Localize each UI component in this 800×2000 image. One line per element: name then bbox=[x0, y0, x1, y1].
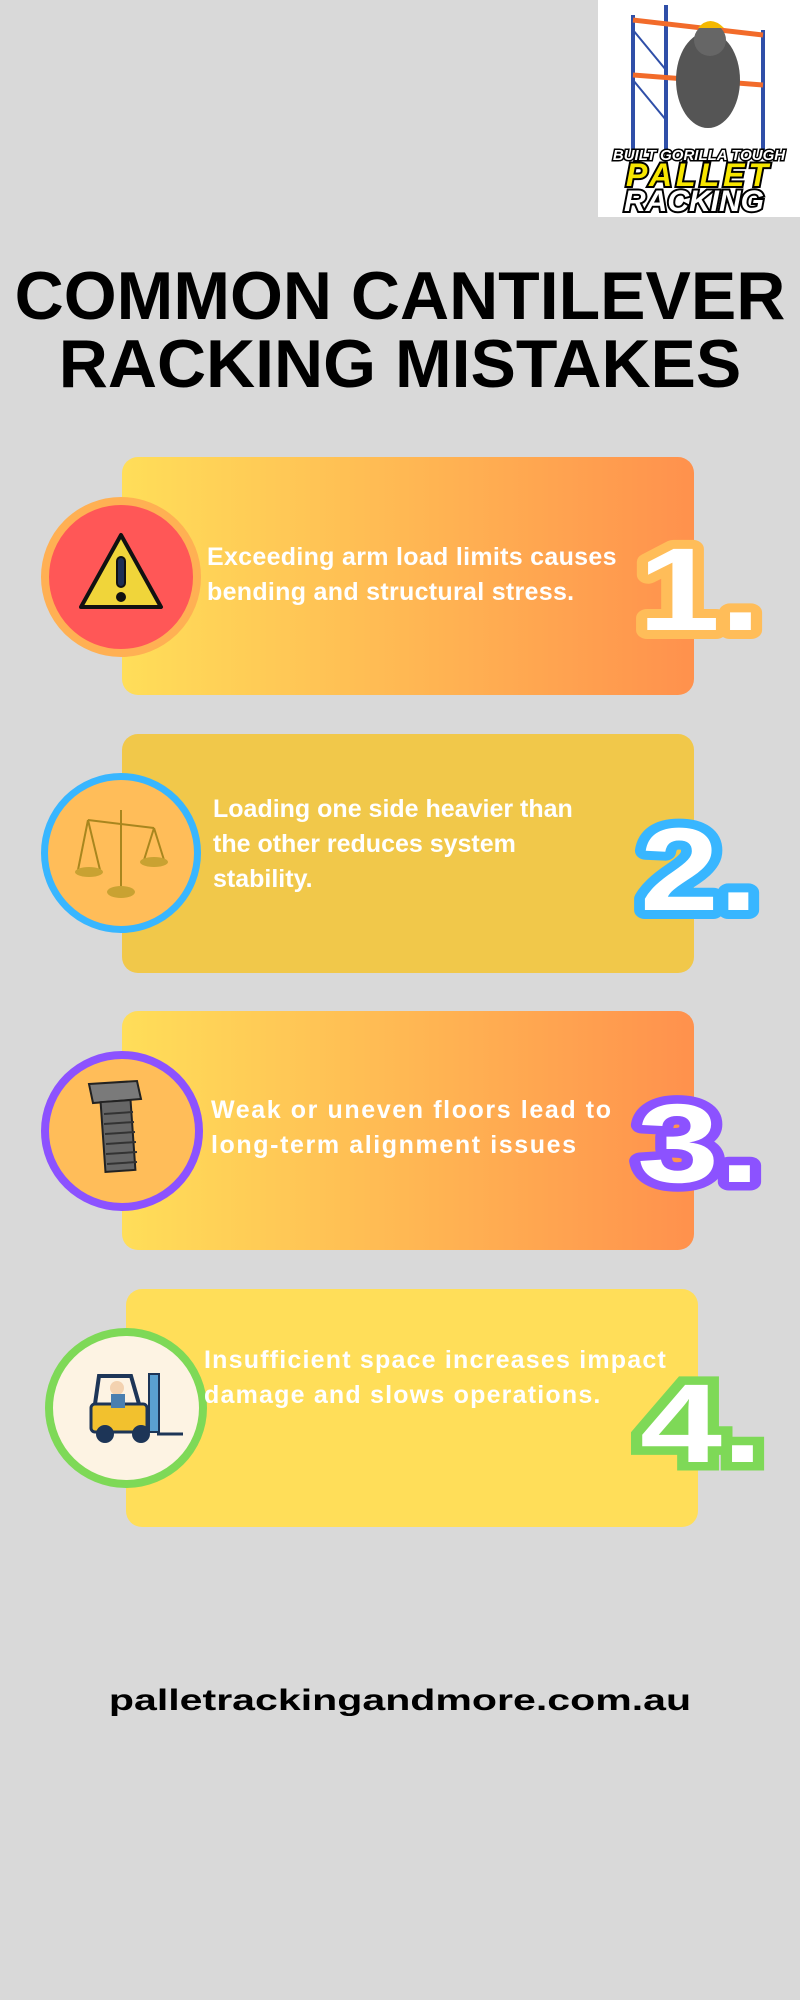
icon: bolt bbox=[41, 1051, 203, 1211]
title: COMMON CANTILEVER bbox=[15, 260, 785, 334]
icon: scales bbox=[41, 773, 201, 933]
panel: mistake 3 bbox=[122, 1011, 694, 1250]
panel: mistake 2 bbox=[122, 734, 694, 973]
logo bbox=[598, 0, 800, 217]
url footer: palletrackingandmore.com.au bbox=[109, 1682, 691, 1717]
icon: warning bbox=[41, 497, 201, 657]
text 4: Insufficient space increases impact damage and slows operations. bbox=[204, 1346, 667, 1409]
title: RACKING MISTAKES bbox=[59, 326, 741, 400]
text 1: Exceeding arm load limits causes bending and structural stress. bbox=[207, 543, 617, 606]
panel: mistake 4 bbox=[126, 1289, 698, 1527]
text 2: Loading one side heavier than the other reduces system stability. bbox=[213, 795, 573, 893]
icon: forklift bbox=[45, 1328, 207, 1488]
panel: mistake 1 bbox=[122, 457, 694, 695]
logo: PALLET bbox=[626, 157, 772, 193]
title bbox=[15, 260, 785, 400]
logo: BUILT GORILLA TOUGH bbox=[613, 147, 786, 164]
text 3: Weak or uneven floors lead to long-term alignment issues bbox=[211, 1096, 613, 1159]
